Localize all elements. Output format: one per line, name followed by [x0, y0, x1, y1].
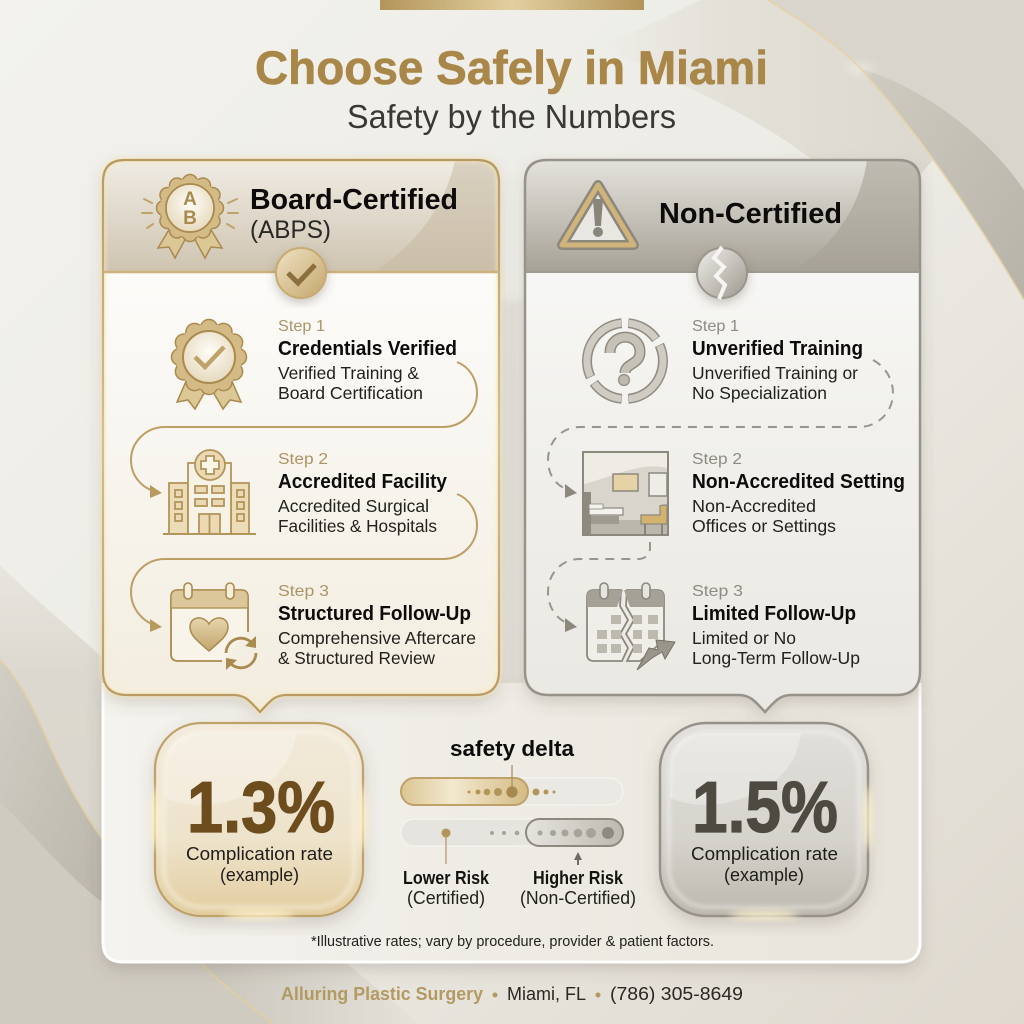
step 2 text: non-certified: Step 2 [692, 451, 742, 468]
bar: non-certified [401, 819, 623, 865]
arrow: step 2 to step 3 [131, 494, 477, 632]
step 3 text: certified: Structured Follow-Up [278, 603, 471, 625]
caption: certified rate: (example) [220, 864, 299, 885]
step 1 text: certified [278, 318, 457, 403]
step 3 text: non-certified [692, 583, 860, 668]
step 3 text: non-certified: Long-Term Follow-Up [692, 648, 860, 668]
icon: credentials rosette [172, 320, 246, 409]
step 2 text: certified: Accredited Facility [278, 471, 448, 493]
caption: non-certified rate: (example) [724, 864, 804, 885]
step 3 text: certified: Step 3 [278, 583, 329, 600]
caption: certified rate: Complication rate [186, 843, 333, 864]
safety delta graphic [401, 736, 636, 908]
dashed arrow: step 2 to step 3 [548, 542, 650, 632]
top gold bar [380, 0, 644, 10]
caption: certified rate [186, 843, 333, 885]
icon: check badge [276, 248, 326, 298]
step 1 text: certified: Board Certification [278, 383, 423, 403]
step 2 text: non-certified: Non-Accredited [692, 496, 816, 516]
step 3 text: certified: & Structured Review [278, 648, 435, 668]
label: lower risk: (Certified) [407, 888, 485, 908]
footer contact line: Miami, FL [507, 983, 586, 1004]
icon: AB rosette [142, 174, 238, 258]
value: 1.5%: 1.5% [692, 768, 838, 848]
lower results card [103, 683, 920, 962]
caption: non-certified rate [691, 843, 838, 885]
heading: board-certified: Board-Certified [250, 184, 458, 216]
heading: board-certified: (ABPS) [250, 216, 331, 244]
label: lower risk [403, 868, 490, 908]
step 3 text: certified: Comprehensive Aftercare [278, 628, 476, 648]
dashed arrow: step 1 to step 2 [548, 360, 893, 498]
icon: AB rosette: A [183, 189, 197, 210]
step 2 text: certified: Accredited Surgical [278, 496, 429, 516]
footer contact line [281, 983, 743, 1004]
panel: board-certified [103, 160, 499, 712]
label: higher risk [520, 868, 636, 908]
step 3 text: non-certified: Limited or No [692, 628, 796, 648]
stat card: certified [151, 723, 367, 919]
icon: broken badge [697, 247, 747, 299]
step 2 text: non-certified: Non-Accredited Setting [692, 471, 905, 493]
step 3 text: certified [278, 583, 476, 668]
heading: board-certified [250, 184, 458, 244]
step 1 text: non-certified: Unverified Training or [692, 363, 858, 383]
step 3 text: non-certified: Step 3 [692, 583, 743, 600]
step 1 text: certified: Credentials Verified [278, 338, 457, 360]
icon: hospital [163, 450, 256, 534]
step 2 text: certified: Step 2 [278, 451, 328, 468]
header band: board-certified [103, 160, 499, 272]
icon: calendar with heart [171, 583, 256, 670]
footer contact line: (786) 305-8649 [610, 983, 743, 1004]
icon: AB rosette: B [183, 208, 197, 229]
subtitle: Safety by the Numbers [347, 98, 676, 135]
panel: non-certified [525, 160, 920, 712]
title: Choose Safely in Miami [255, 41, 768, 94]
bar: certified [401, 765, 623, 805]
label: higher risk: (Non-Certified) [520, 888, 636, 908]
label: higher risk: Higher Risk [533, 868, 624, 888]
footnote: *Illustrative rates; vary by procedure, provider & patient factors. [311, 933, 714, 950]
step 1 text: non-certified: No Specialization [692, 383, 827, 403]
arrow: step 1 to step 2 [131, 362, 477, 498]
step 2 text: certified [278, 451, 448, 536]
icon: non-accredited room [583, 452, 668, 535]
icon: question ring [587, 323, 663, 399]
icon: warning triangle [562, 185, 634, 245]
label: lower risk: Lower Risk [403, 868, 490, 888]
step 2 text: non-certified [692, 451, 905, 536]
step 1 text: certified: Step 1 [278, 318, 325, 335]
stat card: non-certified [660, 723, 872, 919]
step 1 text: non-certified: Unverified Training [692, 338, 863, 360]
step 1 text: certified: Verified Training & [278, 363, 419, 383]
step 2 text: non-certified: Offices or Settings [692, 516, 836, 536]
value: 1.3%: 1.3% [187, 768, 335, 848]
delta heading: safety delta [450, 736, 575, 761]
step 2 text: certified: Facilities & Hospitals [278, 516, 437, 536]
icon: broken calendar [587, 583, 675, 670]
footer contact line: Alluring Plastic Surgery [281, 983, 484, 1004]
caption: non-certified rate: Complication rate [691, 843, 838, 864]
heading: non-certified: Non-Certified [659, 198, 842, 230]
step 1 text: non-certified [692, 318, 863, 403]
step 3 text: non-certified: Limited Follow-Up [692, 603, 856, 625]
header band: non-certified [525, 160, 920, 272]
step 1 text: non-certified: Step 1 [692, 318, 739, 335]
